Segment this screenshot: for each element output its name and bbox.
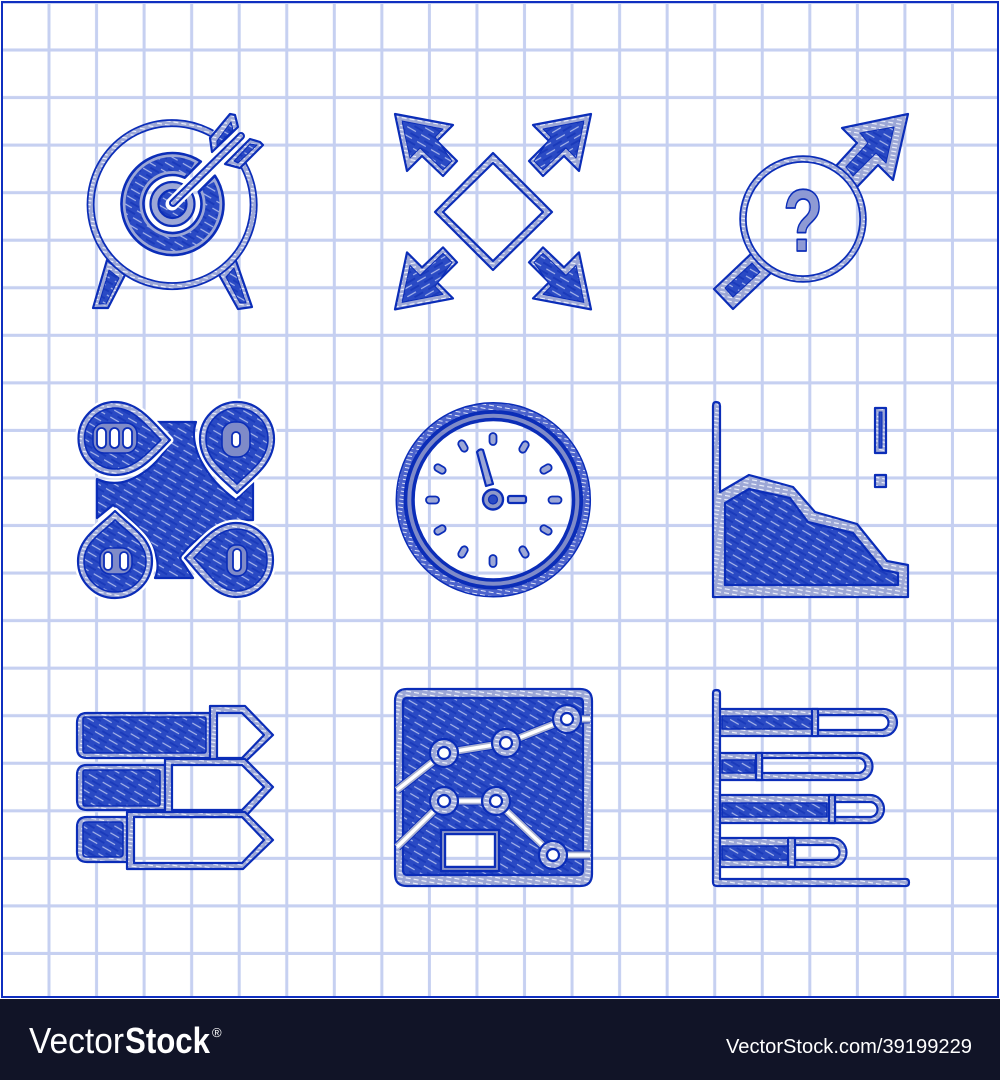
icon: target with arrow [91,114,263,309]
chart lines [397,719,590,855]
icon: magnifier with question mark and arrow [714,114,908,309]
icon: four location pins around a panel [78,402,274,598]
chart nodes [430,705,581,869]
clock hands [477,449,526,510]
registered mark: ® [212,1025,222,1040]
icon: diamond with four outward arrows [395,114,591,309]
chart window frame [441,830,499,871]
icon: horizontal bar chart [713,690,909,886]
question mark: ? [783,173,823,270]
footer banner [0,999,1000,1080]
icon: declining area chart with exclamation [713,402,908,597]
icon: wall clock [400,407,586,593]
VectorStock logo: Stock [125,1020,211,1061]
VectorStock logo [29,1020,211,1061]
clock ticks [426,433,562,567]
icon: three arrow progress bars [77,706,273,869]
icon: line chart panel [395,689,592,886]
VectorStock logo: Vector [29,1020,124,1061]
image id: VectorStock.com/39199229 [726,1036,972,1058]
